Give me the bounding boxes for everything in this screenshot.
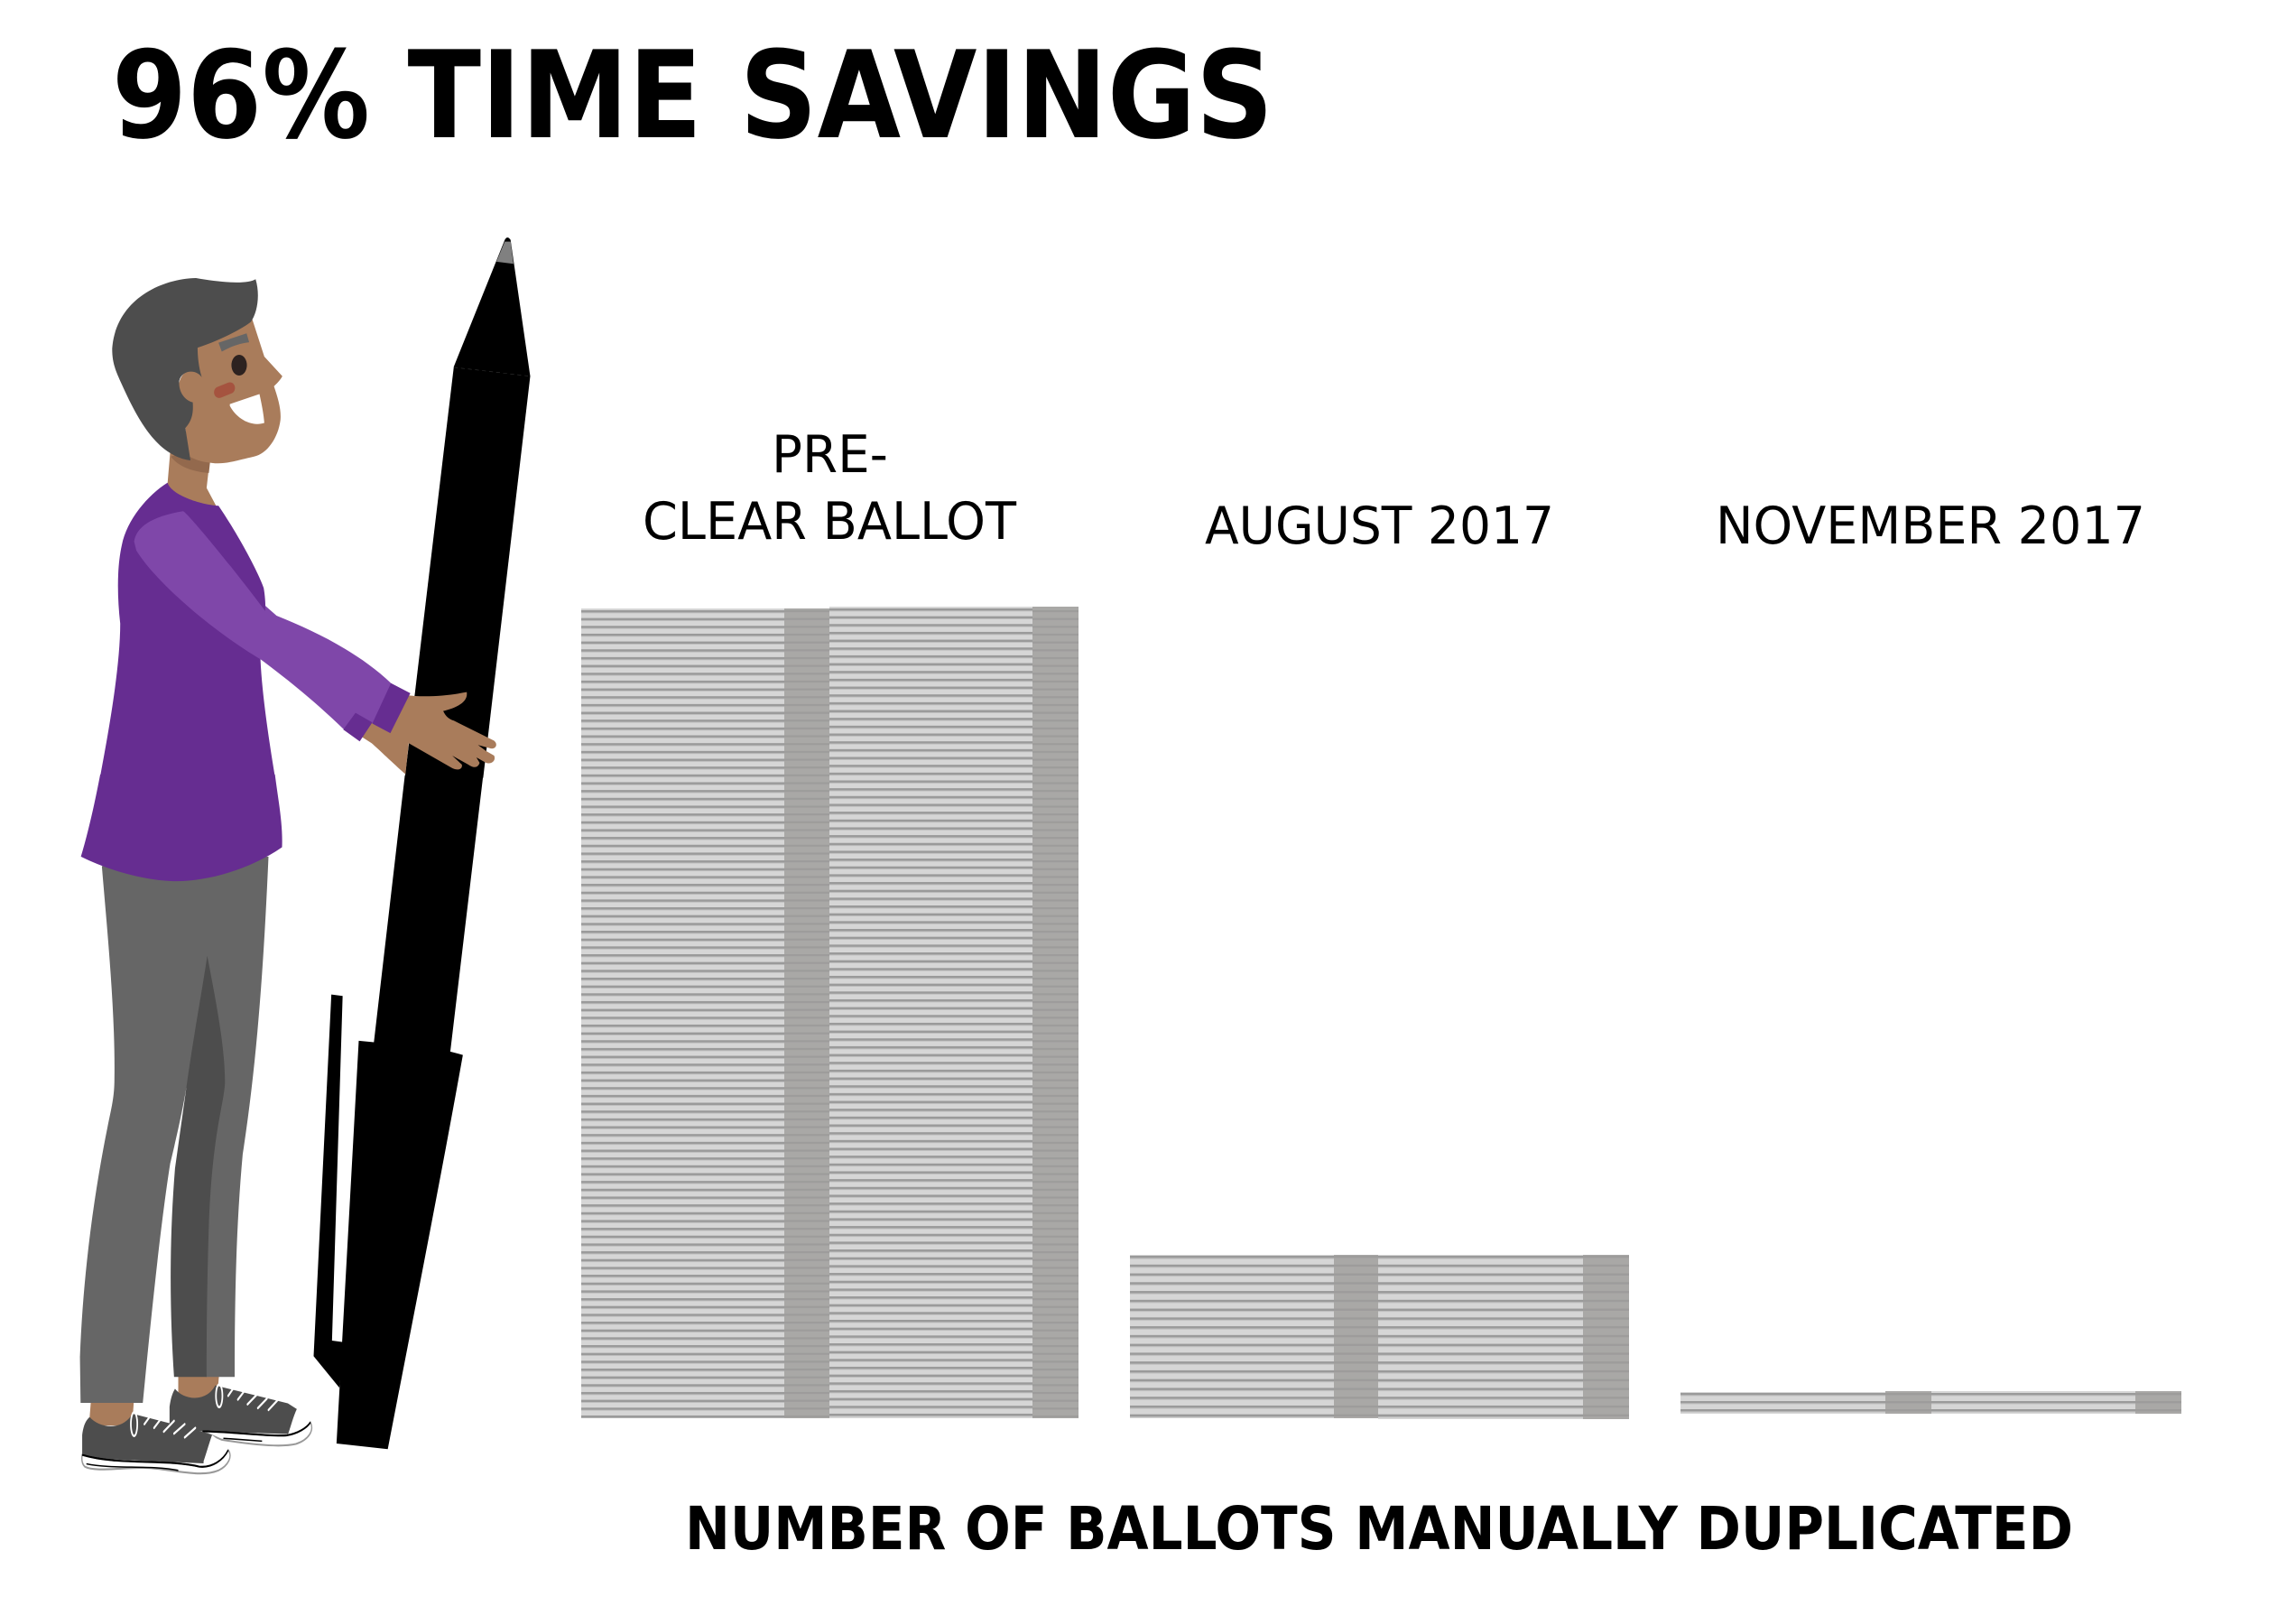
label: pre-clear ballot [643, 425, 1016, 552]
label: august 2017: AUGUST 2017 [1205, 497, 1554, 556]
pen: lower barrel and clip [337, 775, 483, 1449]
shoe: back [170, 1385, 311, 1445]
ankle: back [178, 1374, 219, 1399]
head: smile [230, 395, 264, 424]
hand [360, 692, 496, 775]
shirt: lower [81, 775, 282, 881]
head: eye [231, 355, 247, 376]
label: november 2017: NOVEMBER 2017 [1716, 497, 2145, 556]
person: upper body and pen top [100, 237, 530, 778]
title: 96% TIME SAVINGS [112, 25, 1273, 166]
shoe: front [82, 1412, 230, 1473]
illustration: person holding giant pen [80, 237, 530, 1473]
head: eyebrow [218, 333, 249, 351]
head: cheek [219, 388, 230, 393]
ballot stack: august 2017 [1130, 1255, 1629, 1419]
ballot stack: november 2017 [1680, 1391, 2181, 1414]
ankle: front [89, 1397, 134, 1425]
person: legs and shoes [80, 775, 483, 1473]
pen: upper barrel [405, 237, 530, 778]
ballot stack: pre-clear ballot [581, 607, 1079, 1418]
trousers: back leg shade [171, 956, 225, 1377]
trousers [80, 857, 268, 1403]
axis caption: NUMBER OF BALLOTS MANUALLY DUPLICATED [685, 1494, 2073, 1564]
neck [168, 452, 222, 516]
shirt: torso [100, 483, 275, 776]
pen: grey tip band [496, 242, 514, 264]
head: face and ear [179, 317, 282, 463]
head: hair [112, 278, 258, 460]
sleeve cuff [343, 683, 411, 741]
label: pre-clear ballot: PRE- [772, 425, 888, 485]
sleeve [134, 511, 397, 730]
label: pre-clear ballot: CLEAR BALLOT [643, 492, 1016, 552]
